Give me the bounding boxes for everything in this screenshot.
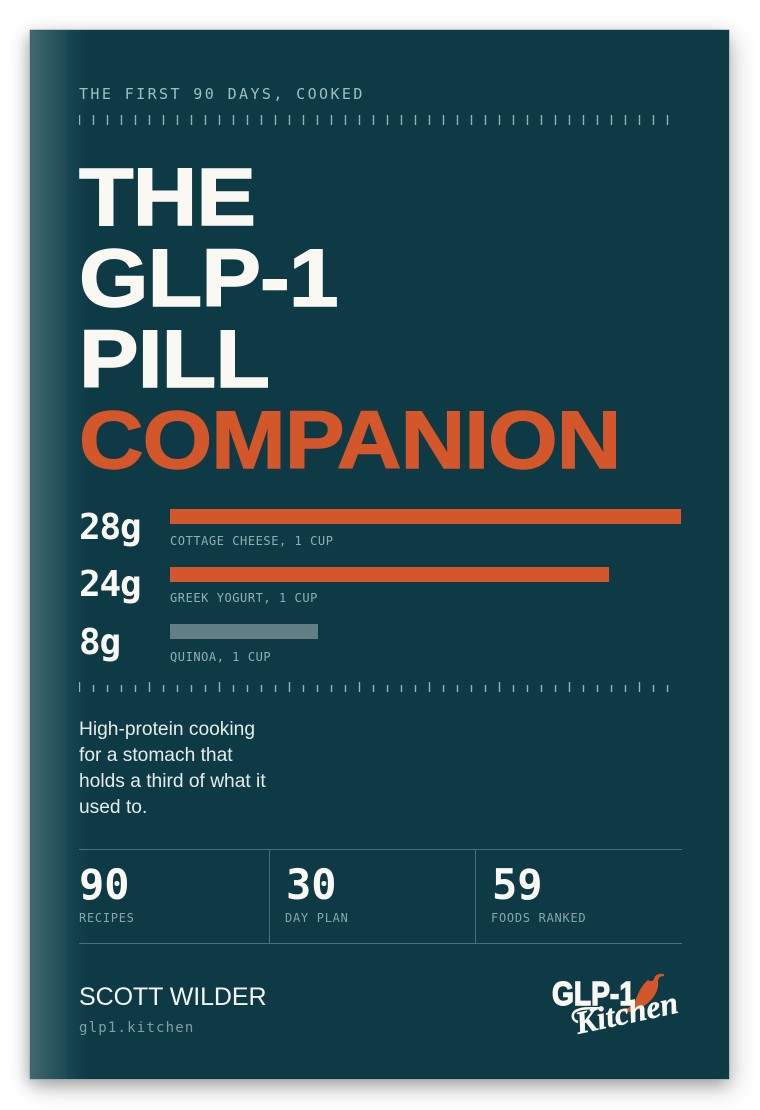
stat: recipes xyxy=(79,850,270,943)
wordmark: GLP-1: GLP-1 xyxy=(552,975,635,1012)
row: cottage cheese xyxy=(79,507,681,548)
protein chart xyxy=(79,507,681,664)
row: quinoa: QUINOA, 1 CUP xyxy=(170,650,271,664)
top ruler xyxy=(79,115,668,125)
eyebrow: THE FIRST 90 DAYS, COOKED xyxy=(79,85,365,103)
icon: chili xyxy=(620,974,664,1012)
row: quinoa xyxy=(79,622,318,664)
title xyxy=(79,152,620,486)
logo xyxy=(552,974,681,1040)
description xyxy=(79,719,266,818)
row: cottage cheese: COTTAGE CHEESE, 1 CUP xyxy=(170,534,333,548)
stat: foods ranked xyxy=(491,860,586,925)
row: cottage cheese: 28g xyxy=(79,507,140,548)
row: greek yogurt: 24g xyxy=(79,564,140,605)
stat: recipes: 90 xyxy=(79,860,130,909)
row: quinoa: 8g xyxy=(79,622,120,663)
description: for a stomach that xyxy=(79,745,233,766)
stat: foods ranked: FOODS RANKED xyxy=(491,911,586,925)
title: THE xyxy=(79,152,255,243)
row: greek yogurt: GREEK YOGURT, 1 CUP xyxy=(170,591,318,605)
description: High-protein cooking xyxy=(79,719,255,740)
stat: foods ranked: 59 xyxy=(492,860,543,909)
title: COMPANION xyxy=(79,395,620,486)
stat: day plan xyxy=(270,850,476,943)
title: PILL xyxy=(79,314,269,405)
stat: day plan: DAY PLAN xyxy=(285,911,349,925)
lower ruler xyxy=(79,682,668,692)
website: glp1.kitchen xyxy=(79,1020,195,1036)
description: used to. xyxy=(79,797,147,818)
description: holds a third of what it xyxy=(79,771,266,792)
row: greek yogurt xyxy=(79,564,609,605)
title: GLP-1 xyxy=(79,233,338,324)
spine xyxy=(30,30,90,1079)
wordmark: Kitchen: Kitchen xyxy=(571,984,681,1040)
stat: day plan: 30 xyxy=(286,860,337,909)
stats strip xyxy=(79,849,682,944)
author: SCOTT WILDER xyxy=(79,983,266,1011)
stat: recipes: RECIPES xyxy=(79,911,135,925)
